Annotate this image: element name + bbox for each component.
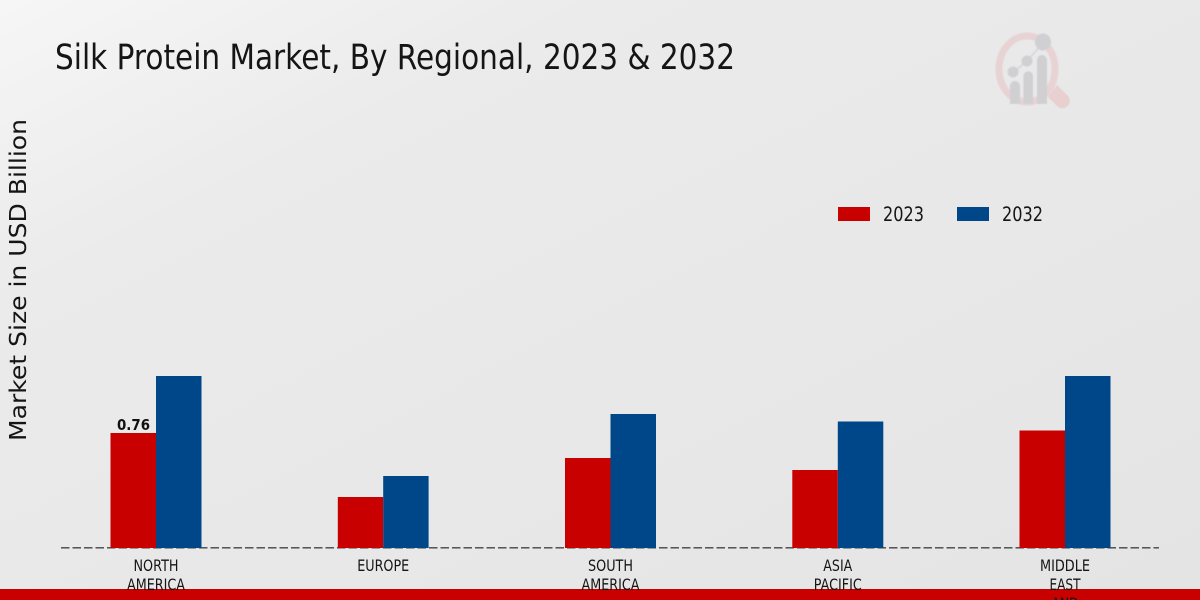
title: Silk Protein Market, By Regional, 2023 & 2032 <box>55 38 735 78</box>
icon: watermark logo <box>999 34 1070 108</box>
label: south america line 2: AMERICA <box>582 575 640 594</box>
label: north america line 2: AMERICA <box>127 575 185 594</box>
label: middle: MIDDLE <box>1040 556 1090 575</box>
baseline axis <box>61 547 1159 549</box>
bars: europe <box>338 476 429 548</box>
label: south: SOUTH <box>588 556 633 575</box>
legend: 2023 <box>838 203 924 226</box>
legend <box>838 203 1043 226</box>
legend: 2032 <box>957 203 1043 226</box>
bars: asia pacific <box>792 422 883 548</box>
label: north: NORTH <box>134 556 178 575</box>
bottom band <box>0 589 1200 600</box>
x axis labels <box>127 556 1090 600</box>
bars: south america <box>565 414 656 548</box>
label: pacific: PACIFIC <box>814 575 862 594</box>
label: europe: EUROPE <box>357 556 409 575</box>
legend: 2023: 2023 <box>883 203 924 226</box>
legend: 2032: 2032 <box>1002 203 1043 226</box>
y axis title: Market Size in USD Billion <box>4 119 32 441</box>
bars: middle east and africa <box>1020 376 1110 548</box>
label: asia: ASIA <box>823 556 852 575</box>
label: east: EAST <box>1050 575 1081 594</box>
bars: north america <box>110 376 202 548</box>
value label: 0.76 <box>117 416 150 434</box>
